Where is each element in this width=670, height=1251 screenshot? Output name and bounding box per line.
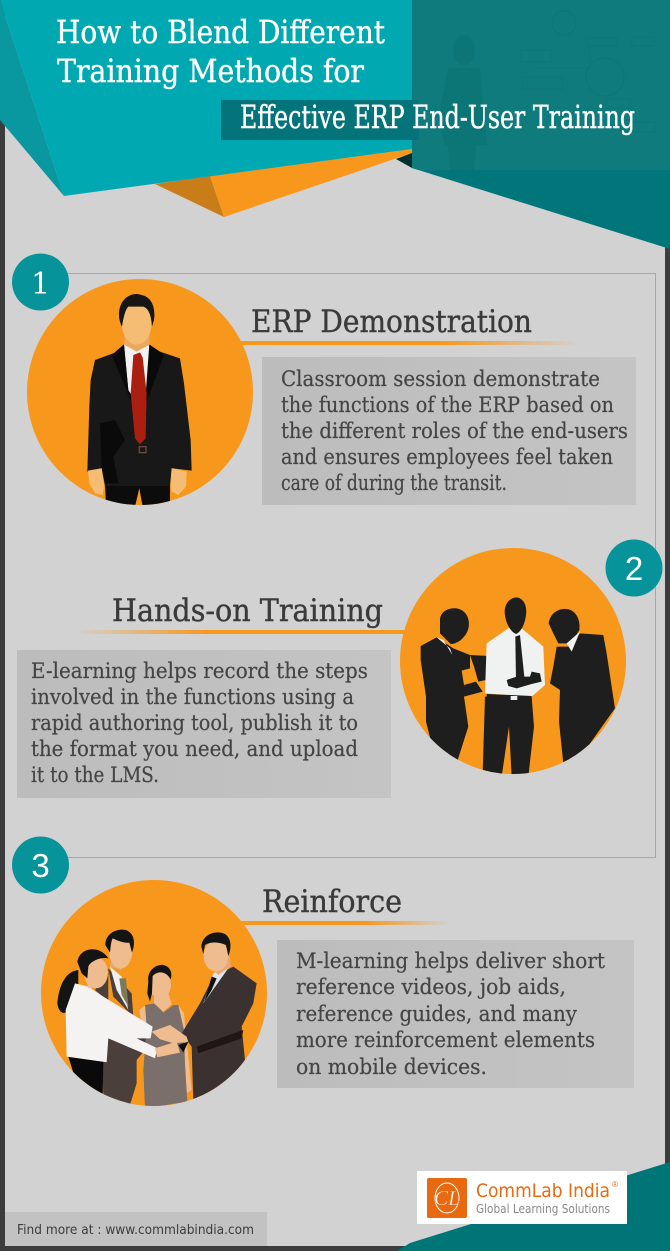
logo: CommLab India: CommLab India (476, 1180, 610, 1202)
number badge 1 (12, 254, 69, 310)
text block: E-learning helps record the steps (31, 659, 368, 683)
text block: M-learning helps deliver short (296, 949, 606, 973)
title (56, 13, 635, 136)
heading underline (240, 921, 450, 925)
title: How to Blend Different (56, 13, 385, 51)
text block (262, 357, 636, 505)
number badge 3: 3 (31, 847, 50, 884)
text block: Classroom session demonstrate (281, 367, 600, 391)
number badge 1: 1 (31, 267, 50, 302)
joined hands (152, 1025, 188, 1043)
man right (182, 967, 257, 1102)
text block: involved in the functions using a (31, 685, 354, 709)
illustration: team joining hands (41, 880, 267, 1108)
heading: Hands-on Training (112, 593, 383, 629)
title: Training Methods for (57, 52, 365, 90)
section 1: ERP Demonstration (12, 254, 636, 507)
footer link (5, 1212, 267, 1246)
text block (17, 650, 391, 798)
text block: reference guides, and many (296, 1002, 577, 1026)
text block: reference videos, job aids, (296, 975, 566, 999)
number badge 2 (606, 540, 662, 596)
logo: CommLab India (417, 1171, 627, 1224)
text block: on mobile devices. (296, 1055, 487, 1079)
orange fold (155, 149, 412, 217)
text block: the format you need, and upload (31, 737, 358, 761)
title band (221, 100, 419, 140)
illustration: three colleagues silhouettes (400, 548, 626, 777)
man behind (95, 968, 146, 1104)
heading: Reinforce (262, 884, 402, 920)
text block: care of during the transit. (281, 471, 507, 495)
header banner (0, 0, 670, 249)
footer link: Find more at : www.commlabindia.com (17, 1222, 254, 1238)
illustration: presenter in suit (27, 279, 253, 507)
heading underline (240, 341, 580, 345)
text block (277, 940, 634, 1088)
text block: it to the LMS. (31, 763, 159, 787)
logo: CommLab India: ® (612, 1180, 618, 1189)
number badge 3 (12, 836, 69, 894)
woman middle (139, 1006, 146, 1023)
section 2: Hands-on Training (17, 540, 662, 798)
header photo panel (412, 0, 670, 249)
text block: rapid authoring tool, publish it to (31, 711, 358, 735)
footer corner (397, 1162, 670, 1251)
text block: the functions of the ERP based on (281, 393, 614, 417)
text block: and ensures employees feel taken (281, 445, 613, 469)
heading: ERP Demonstration (251, 304, 532, 340)
logo: CommLab India: Global Learning Solutions (476, 1202, 610, 1216)
woman left (57, 970, 78, 1013)
text block: the different roles of the end-users (281, 419, 628, 443)
heading underline (75, 630, 405, 634)
teal banner (0, 0, 412, 196)
connector lines (68, 274, 656, 858)
number badge 2: 2 (625, 550, 643, 587)
section 3: Reinforce (12, 836, 634, 1108)
logo: CommLab India: CL (434, 1186, 460, 1210)
text block: more reinforcement elements (296, 1028, 595, 1052)
